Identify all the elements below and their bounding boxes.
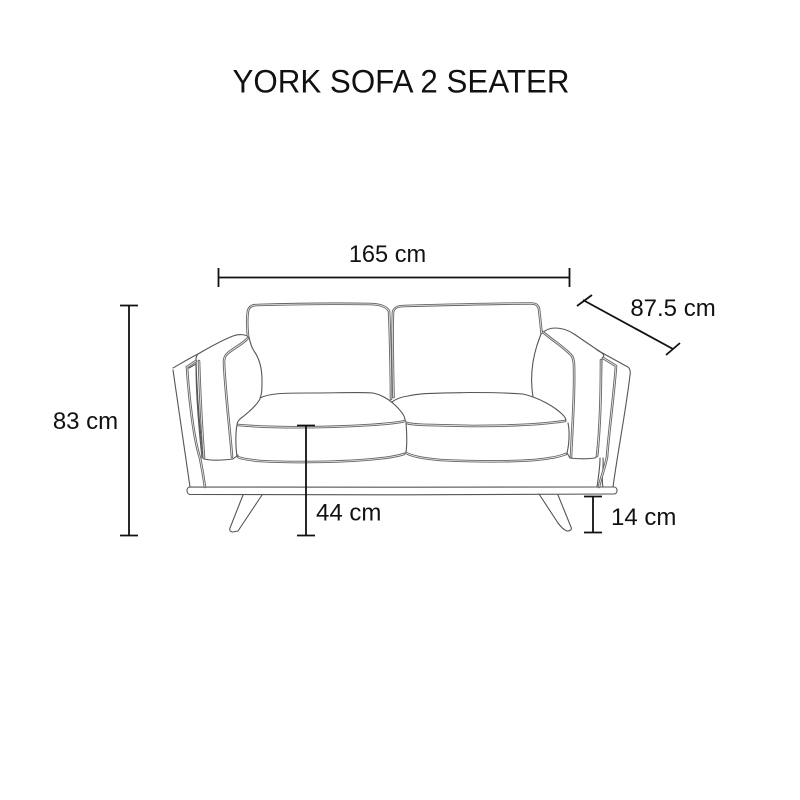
title: YORK SOFA 2 SEATER: [232, 64, 570, 100]
dimension: depth 87.5 cm: 87.5 cm: [630, 295, 716, 322]
dimension: depth 87.5 cm: [577, 295, 716, 355]
dimension: height 83 cm: [53, 306, 138, 536]
dimension: width 165 cm: [218, 242, 570, 287]
dimension: width 165 cm: 165 cm: [349, 242, 426, 268]
dimension: height 83 cm: 83 cm: [53, 408, 118, 435]
sofa line drawing: [173, 304, 630, 532]
sofa thin outlines: [173, 328, 630, 532]
dimension: leg height 14 cm: [584, 496, 676, 532]
dimension: leg height 14 cm: 14 cm: [611, 504, 676, 531]
dimension: seat height 44 cm: [297, 426, 381, 536]
sofa piping seams: [187, 304, 616, 487]
dimension: seat height 44 cm: 44 cm: [316, 500, 381, 526]
